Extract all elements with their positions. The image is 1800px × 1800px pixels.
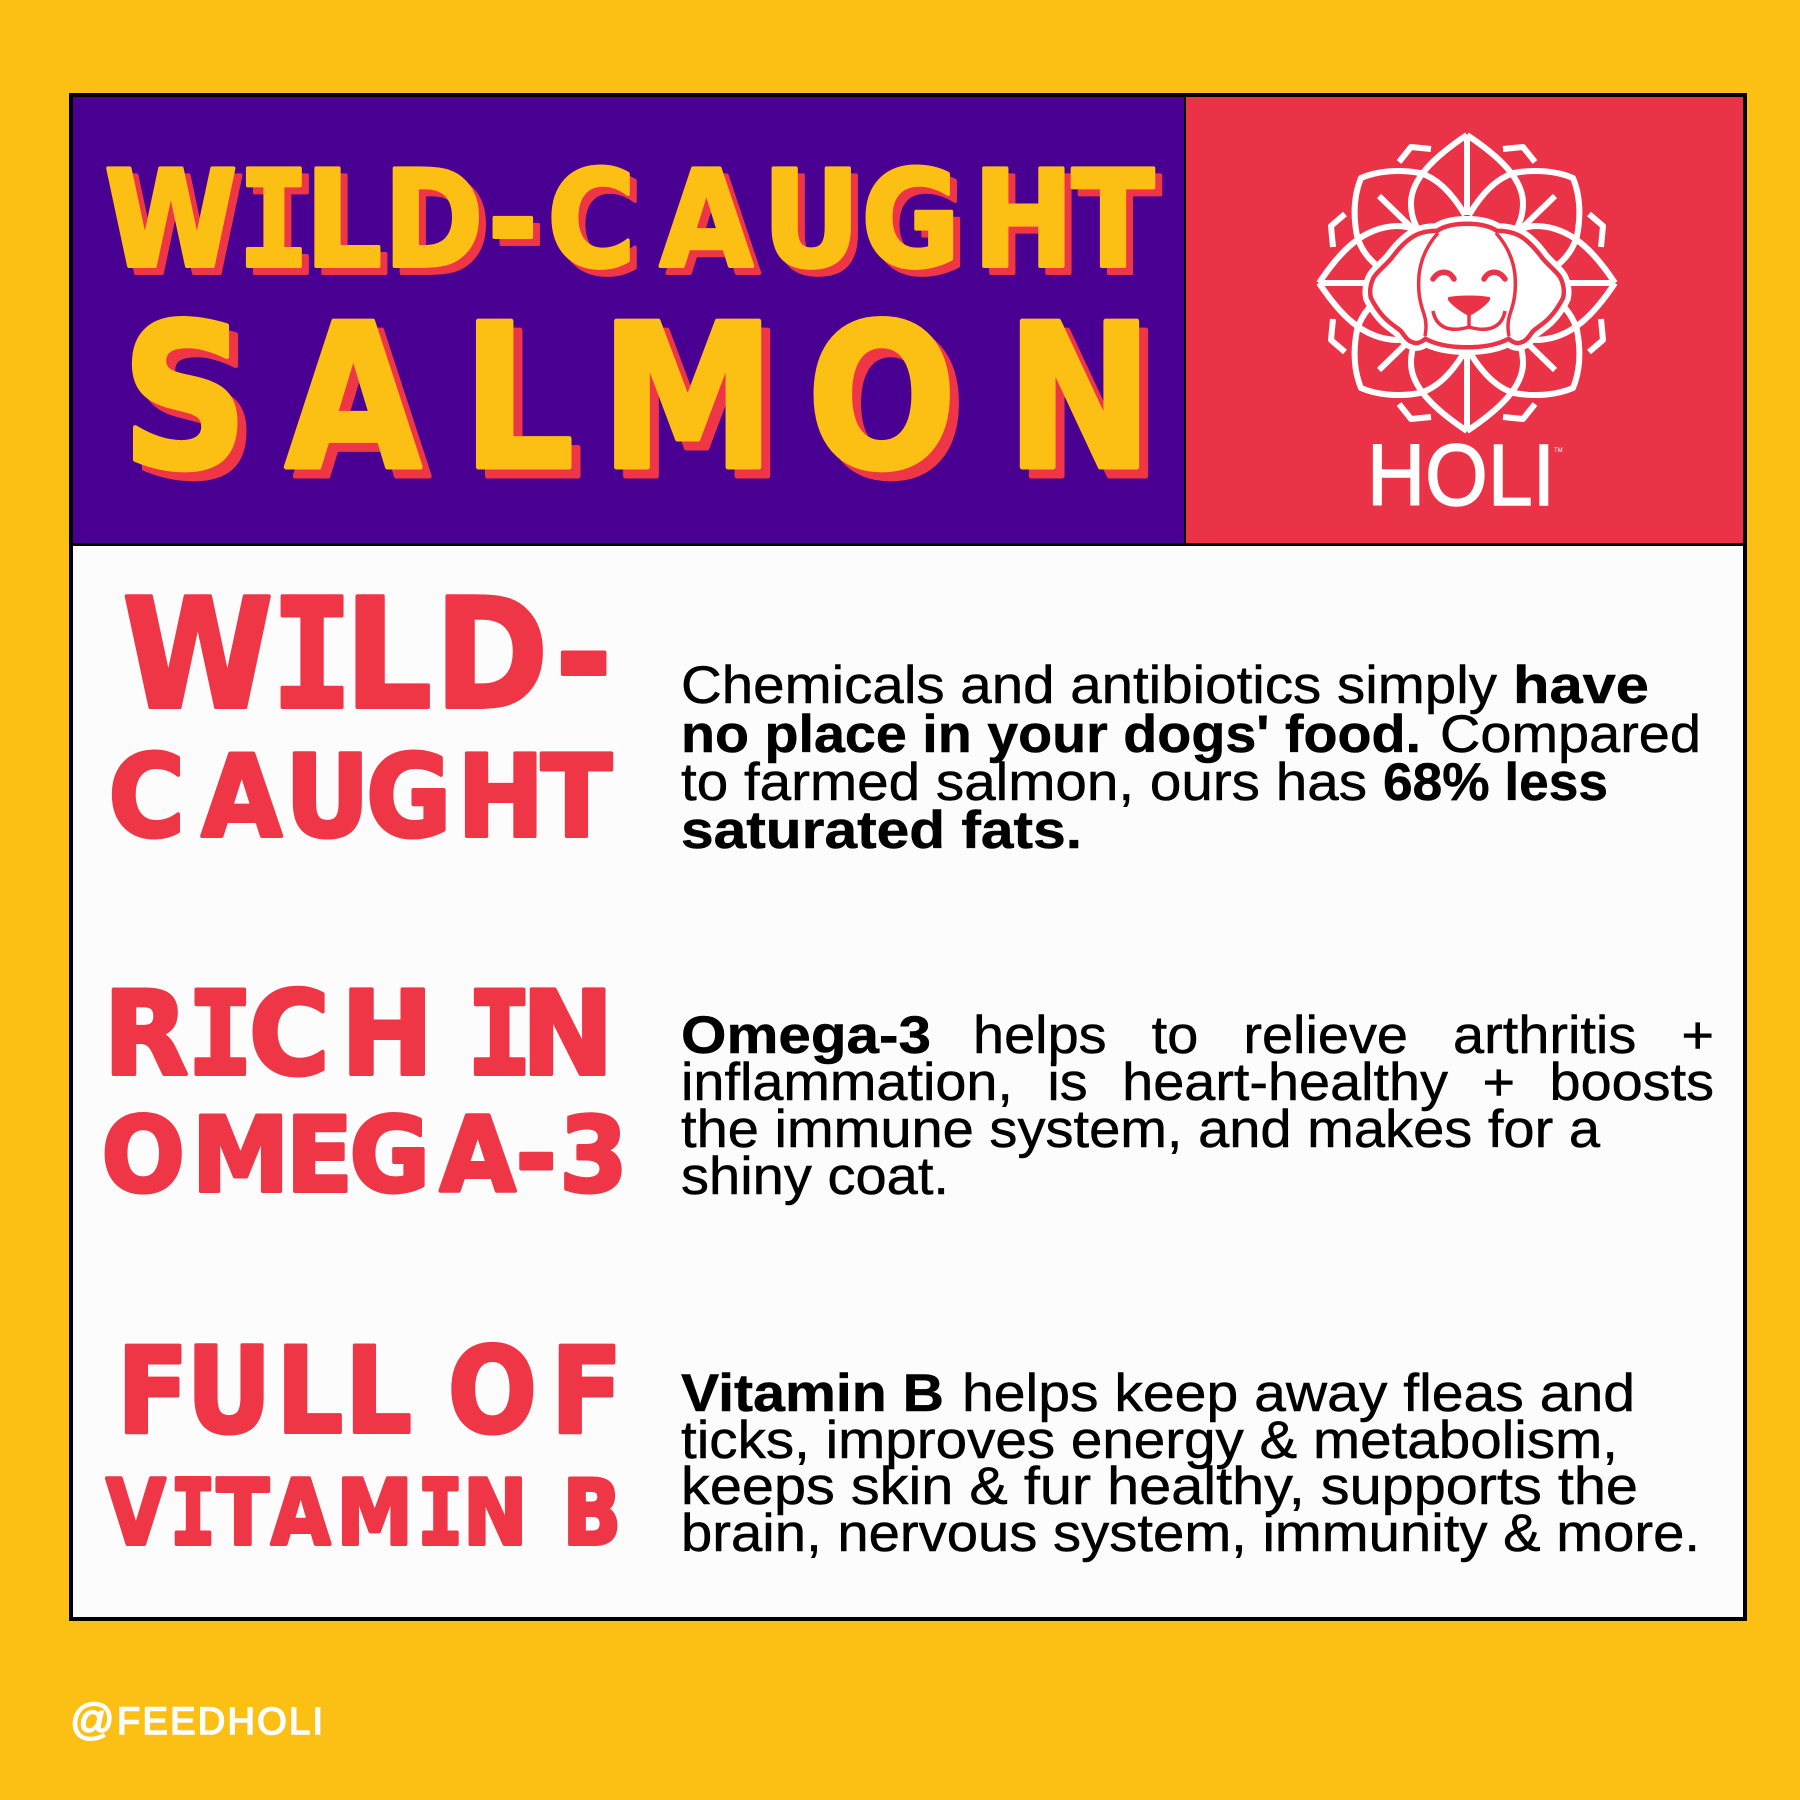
eyes — [1433, 272, 1505, 279]
heading: salmon: SALMON — [121, 282, 1153, 515]
text: omega-3 description: inflammation, is heart-healthy + boosts — [681, 1053, 1714, 1112]
text: vitamin b description: helps keep away fleas and — [962, 1364, 1635, 1423]
text: wild-caught description: 68% less — [1383, 753, 1608, 812]
text: omega-3 description: Omega-3 — [681, 1006, 931, 1065]
heading: full of vitamin b: VITAMIN B — [106, 1460, 621, 1566]
heading: wild- caught: CAUGHT — [109, 731, 612, 863]
diagonal petals — [1355, 171, 1465, 275]
panel: main frame — [69, 93, 1747, 1621]
panel: title banner — [73, 97, 1184, 543]
text: omega-3 description — [681, 1006, 1714, 1206]
text: vitamin b description: brain, nervous system, immunity & more. — [681, 1504, 1700, 1563]
panel: logo — [1186, 97, 1743, 543]
dog silhouette — [1372, 226, 1562, 345]
section: omega-3 — [102, 966, 1714, 1216]
heading: wild-caught: WILD-CAUGHT — [104, 143, 1154, 299]
text: vitamin b description: Vitamin B — [681, 1364, 944, 1423]
text: wild-caught description: have — [1513, 656, 1649, 715]
section: wild-caught — [109, 567, 1701, 863]
text: wild-caught description: no place in your dogs' food. — [681, 705, 1421, 764]
brackets — [1331, 147, 1603, 419]
footer handle: @FEEDHOLI — [70, 1695, 323, 1744]
text: wild-caught description: saturated fats. — [681, 801, 1082, 860]
nose — [1449, 296, 1489, 315]
text: wild-caught description: Compared — [1440, 705, 1701, 764]
heading: full of vitamin b — [106, 1323, 622, 1566]
text: vitamin b description: ticks, improves energy & metabolism, — [681, 1411, 1618, 1470]
heading: wild- caught: WILD- — [122, 567, 612, 744]
text: omega-3 description: helps to relieve arthritis + — [973, 1006, 1714, 1065]
spokes — [1321, 137, 1613, 429]
heading: wild- caught — [109, 567, 612, 863]
text: wild-caught description: to farmed salmon, ours has — [681, 753, 1367, 812]
logo wordmark: HOLI — [1367, 427, 1555, 524]
icon: dog mandala logo — [1319, 135, 1615, 431]
text: vitamin b description — [681, 1364, 1700, 1563]
heading: full of vitamin b: FULL OF — [117, 1323, 622, 1461]
heading: rich in omega-3: OMEGA-3 — [102, 1096, 628, 1216]
heading: rich in omega-3 — [102, 966, 628, 1216]
leaves — [1411, 135, 1523, 431]
logo wordmark: TM — [1554, 448, 1563, 454]
text: omega-3 description: shiny coat. — [681, 1147, 949, 1206]
ear and jaw lines — [1419, 233, 1515, 336]
section: vitamin b — [106, 1323, 1700, 1566]
text: omega-3 description: the immune system, and makes for a — [681, 1100, 1601, 1159]
heading: rich in omega-3: RICH IN — [104, 966, 614, 1102]
mouth — [1433, 311, 1505, 329]
text: wild-caught description — [681, 656, 1701, 860]
text: wild-caught description: Chemicals and antibiotics simply — [681, 656, 1498, 715]
text: vitamin b description: keeps skin & fur healthy, supports the — [681, 1457, 1638, 1516]
